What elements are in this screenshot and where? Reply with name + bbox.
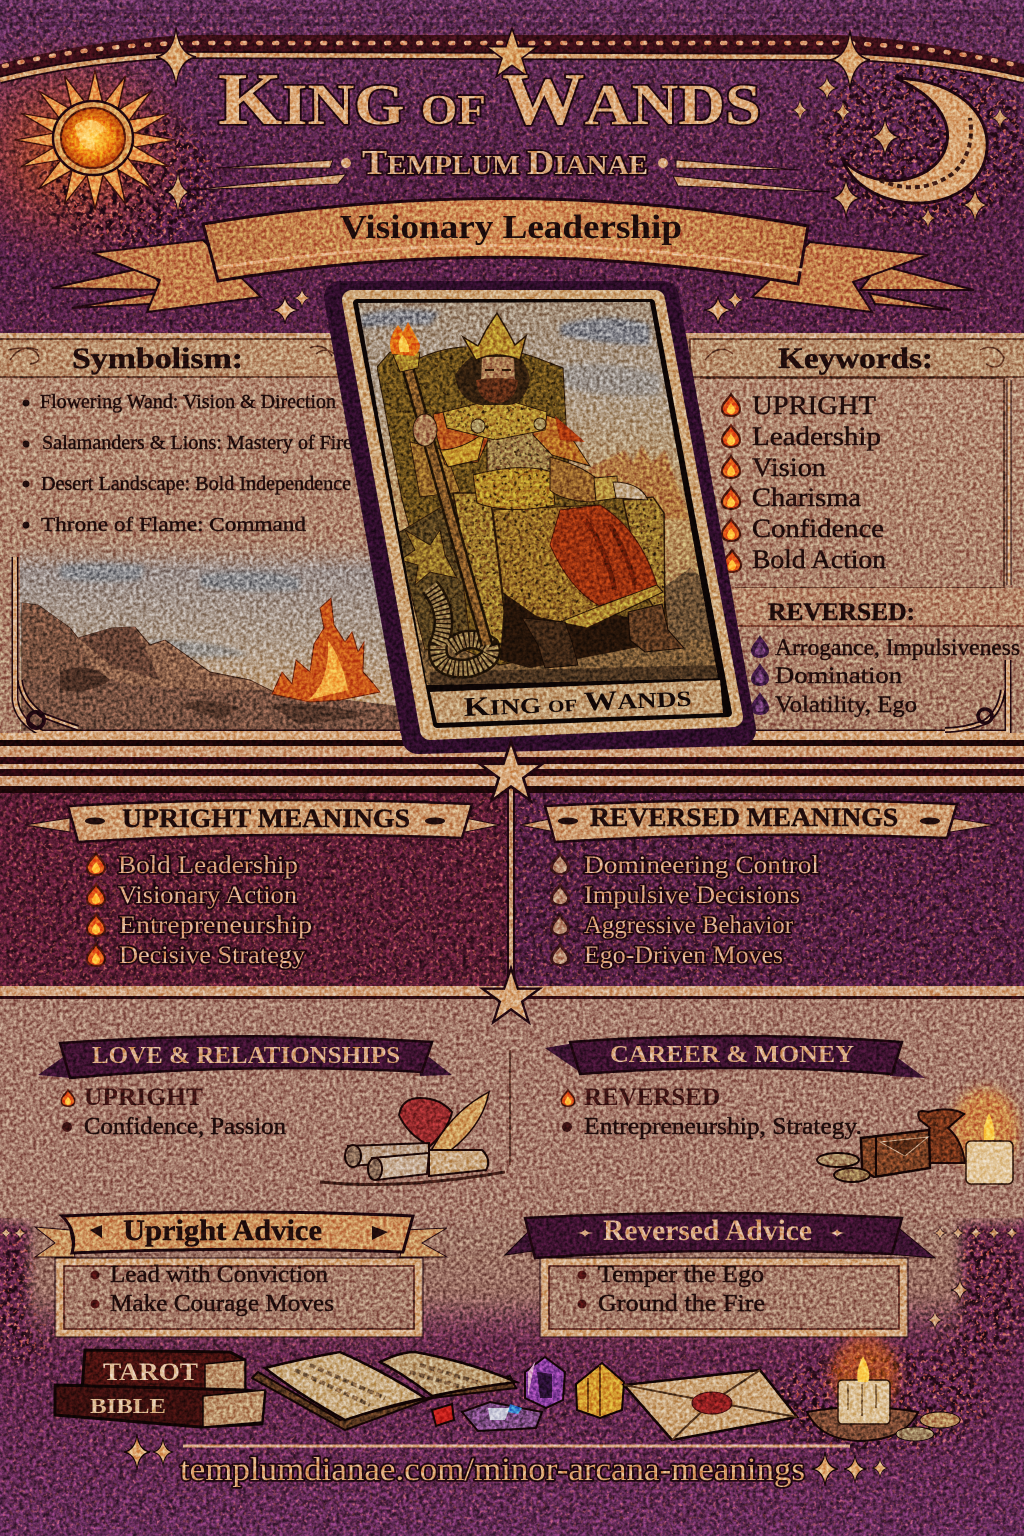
list: upright meanings: [86, 851, 312, 969]
panel: upright advice: [35, 1212, 447, 1337]
leaves: [400, 530, 457, 585]
text: career: [560, 1084, 862, 1140]
book: bible: BIBLE: [90, 1394, 166, 1418]
footer url: [124, 1434, 888, 1488]
heading: Symbolism: Symbolism:: [72, 342, 243, 375]
frame corner ornament: [750, 660, 1008, 733]
icon: divider star bottom: [482, 968, 540, 1022]
banner: love and relationships: [38, 1036, 452, 1078]
header ornament: arch with stars: [0, 27, 1024, 90]
title: KING OF WANDS: [218, 59, 761, 141]
icon: sun: [15, 70, 175, 210]
symbolism list: Throne of Flame: Command: [41, 514, 306, 536]
banner: upright advice: [35, 1212, 447, 1257]
panel: king of wands card: [340, 295, 740, 738]
upright keyword list: [721, 391, 886, 574]
section: love and career parchment: [0, 986, 1024, 1352]
hand: [413, 414, 437, 446]
sparkles by banner: [271, 288, 744, 324]
text: career: REVERSED: [584, 1084, 720, 1111]
reversed keyword list: Volatility, Ego: [775, 692, 917, 717]
text: love: UPRIGHT: [84, 1084, 203, 1111]
torso armor: [473, 425, 555, 510]
list: upright meanings: Visionary Action: [118, 882, 298, 909]
banner: reversed advice: Reversed Advice: [603, 1214, 812, 1247]
list: upright meanings: Entrepreneurship: [119, 912, 312, 939]
banner: Visionary Leadership: [52, 198, 974, 312]
reversed advice list: Ground the Fire: [598, 1291, 765, 1317]
reversed keyword list: Domination: [775, 663, 903, 688]
robe: [493, 505, 663, 628]
section: meanings background: [0, 790, 1024, 990]
symbolism list: [22, 391, 352, 536]
upright keyword list: UPRIGHT: [752, 391, 876, 420]
symbolism list: Salamanders & Lions: Mastery of Fire: [42, 432, 352, 454]
book: tarot: [82, 1350, 245, 1392]
card outer frame: [340, 297, 740, 738]
list: upright meanings: Bold Leadership: [118, 852, 298, 879]
banner: Visionary Leadership: Visionary Leadership: [340, 209, 682, 246]
list: reversed meanings: Impulsive Decisions: [584, 882, 800, 909]
fire: [272, 598, 380, 702]
list: reversed meanings: Aggressive Behavior: [584, 912, 794, 939]
card caption: [430, 680, 723, 723]
banner: upright meanings: UPRIGHT MEANINGS: [122, 804, 410, 833]
list: reversed meanings: Ego-Driven Moves: [584, 942, 783, 969]
vertical divider: [507, 780, 515, 995]
banner: reversed meanings: REVERSED MEANINGS: [590, 803, 898, 832]
serpent tail: [430, 587, 491, 669]
list: reversed meanings: [550, 851, 819, 969]
wand flame: [390, 322, 420, 356]
hair and head: [455, 350, 530, 405]
panel: keywords: [680, 333, 1024, 740]
footer rule: [183, 1444, 850, 1448]
banner: career and money: [545, 1036, 925, 1078]
banner: reversed advice: [505, 1213, 935, 1258]
card illustration: [350, 295, 730, 690]
icon: scrolls, heart and quill: [320, 1092, 505, 1184]
book: tarot: TAROT: [103, 1359, 198, 1386]
heading: Keywords: Keywords:: [778, 342, 933, 375]
banner: career and money: CAREER & MONEY: [610, 1042, 854, 1068]
text: love: [60, 1084, 286, 1140]
panel: symbolism: [0, 333, 410, 740]
symbolism list: Desert Landscape: Bold Independence: [41, 473, 351, 495]
symbolism list: Flowering Wand: Vision & Direction: [40, 391, 336, 413]
icon: crescent moon with stars: [166, 75, 1009, 230]
icon: sealed envelope: [624, 1370, 797, 1440]
upright advice list: [90, 1262, 334, 1317]
distant hills and rocks: [585, 445, 690, 520]
subtitle: Templum Dianae: TEMPLUM DIANAE: [362, 143, 648, 182]
divider bands under top panels: [0, 733, 1024, 793]
upright keyword list: Leadership: [752, 422, 881, 451]
list: reversed meanings: Domineering Control: [584, 852, 819, 879]
panel: reversed advice: [505, 1213, 935, 1337]
banner: upright advice: Upright Advice: [123, 1214, 322, 1247]
subtitle: Templum Dianae: [190, 143, 830, 192]
landscape with fire: [20, 535, 410, 732]
upright keyword list: Vision: [752, 453, 826, 482]
panel: king of wands card: KING OF WANDS: [463, 682, 692, 722]
text: career: Entrepreneurship, Strategy.: [584, 1114, 862, 1140]
upright advice list: Lead with Conviction: [110, 1262, 328, 1288]
icon: divider star top: [480, 741, 542, 801]
card tan border: [352, 300, 733, 730]
sleeves: [550, 457, 617, 502]
shadow under king: [500, 595, 638, 668]
icon: candle in bowl: [807, 1337, 960, 1441]
banner: love and relationships: LOVE & RELATIONSHIPS: [92, 1043, 400, 1069]
cape: [433, 405, 488, 465]
upright keyword list: Confidence: [752, 514, 884, 543]
banner: upright meanings: [25, 800, 500, 842]
icon: treasure chest, coins and candle: [817, 1088, 1019, 1184]
footer url: templumdianae.com/minor-arcana-meanings: [180, 1452, 805, 1488]
boots: [522, 618, 578, 668]
icon: crystals: [432, 1357, 624, 1431]
icons: books: [55, 1350, 265, 1427]
crown: [463, 313, 526, 360]
reversed keyword list: Arrogance, Impulsiveness: [775, 635, 1020, 660]
reversed advice list: Temper the Ego: [598, 1262, 764, 1288]
wand: [407, 365, 487, 645]
upright advice list: Make Courage Moves: [110, 1291, 334, 1317]
throne: [377, 346, 668, 665]
frame corner ornament: [15, 557, 400, 733]
reversed advice list: [578, 1262, 765, 1317]
banner: reversed meanings: [520, 800, 995, 842]
list: upright meanings: Decisive Strategy: [119, 942, 306, 969]
upright keyword list: Bold Action: [752, 545, 886, 574]
upright keyword list: Charisma: [752, 483, 861, 512]
reversed keyword list: REVERSED:: [768, 599, 915, 626]
icon: diamonds beside advice banners: [0, 1226, 1019, 1330]
reversed keyword list: [733, 588, 1024, 717]
icon: open book: [252, 1352, 516, 1430]
book: bible: [55, 1385, 265, 1427]
text: love: Confidence, Passion: [84, 1114, 286, 1140]
